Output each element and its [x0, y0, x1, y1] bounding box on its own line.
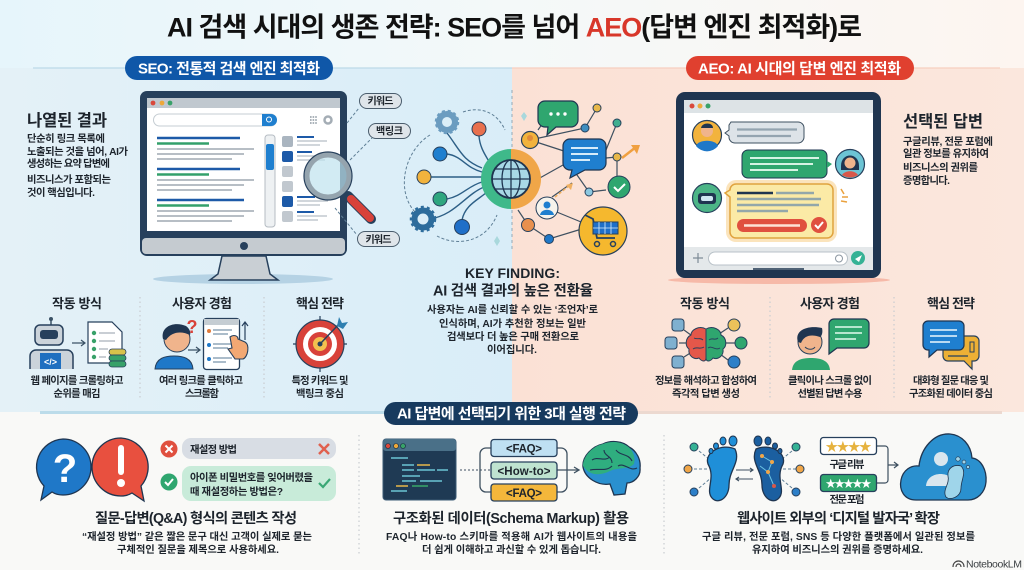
chip: backlink: 백링크: [376, 126, 403, 138]
chip: keyword 1: [360, 94, 402, 108]
panel: strategy 3 digital footprint: 유지하여 비즈니스의 권위를 증명하세요.: [752, 543, 923, 556]
strategy banner: [384, 402, 638, 425]
chip: keyword 1: 키워드: [368, 94, 394, 108]
badge: expert forum: ★★★★★: [826, 478, 872, 490]
SEO column: user experience: 사용자 경험: [172, 296, 232, 311]
panel: strategy 2 Schema: FAQ나 How-to 스키마를 적용해 AI가 웹사이트의 내용을: [386, 530, 638, 543]
key finding: [427, 265, 599, 356]
badge: expert forum: [820, 474, 876, 506]
AEO column: how it works: 정보를 해석하고 합성하여: [655, 374, 757, 387]
title: AI 검색 시대의 생존 전략: SEO를 넘어 AEO(답변 엔진 최적화)로: [167, 12, 862, 42]
icon: tablet with chat answer: [668, 92, 890, 284]
key finding: 검색보다 더 높은 구매 전환으로: [447, 330, 580, 343]
good example row: [160, 466, 336, 501]
icon: code window: [383, 439, 456, 500]
panel: strategy 3 digital footprint: 웹사이트 외부의 ‘디지털 발자국’ 확장: [737, 510, 940, 527]
right network: [518, 101, 640, 255]
icon: cloud with person and footprint: [901, 434, 986, 500]
SEO column: how it works: 순위를 매김: [54, 387, 100, 400]
SEO column: user experience: 스크롤함: [185, 387, 220, 400]
icon: happy user with chat bubble: [792, 319, 869, 370]
chat: highlighted AI answer: [692, 180, 848, 242]
SEO column: key strategy: 핵심 전략: [296, 296, 344, 311]
icon: footprints with nodes: [684, 436, 804, 501]
key finding: 인식하며, AI가 추천한 정보는 일반: [439, 317, 587, 330]
left network: [404, 110, 505, 241]
SEO intro text: 노출되는 것을 넘어, AI가: [27, 145, 129, 158]
badge: expert forum: 전문 포럼: [830, 494, 864, 506]
AEO heading pill: AEO: AI 시대의 답변 엔진 최적화: [698, 60, 901, 78]
AEO intro text: 비즈니스의 권위를: [903, 161, 979, 174]
SEO intro text: 단순히 링크 목록에: [27, 132, 105, 145]
AEO column: user experience: 선별된 답변 수용: [798, 387, 863, 400]
icon: monitor with search results: [140, 91, 347, 284]
SEO intro text: 나열된 결과: [27, 111, 107, 130]
chip: keyword 2: [358, 232, 400, 246]
SEO intro text: 것이 핵심입니다.: [27, 186, 95, 199]
AEO intro text: 구글리뷰, 전문 포럼에: [903, 135, 993, 148]
panel: strategy 1 Q&A: [37, 438, 336, 556]
review badges: [820, 438, 898, 506]
SEO intro text: 생성하는 요약 답변에: [27, 157, 110, 170]
icon: overlapping chat bubbles: [923, 321, 979, 369]
SEO intro text: 비즈니스가 포함되는: [27, 173, 112, 186]
SEO column: how it works: [30, 296, 126, 400]
panel: strategy 1 Q&A: “재설정 방법” 같은 짧은 문구 대신 고객이 실제로 묻는: [82, 530, 313, 543]
icon: globe: [481, 149, 541, 209]
icon: question and exclamation bubbles: ?: [53, 447, 77, 491]
AEO column: key strategy: 대화형 질문 대응 및: [913, 374, 989, 387]
strategy banner: AI 답변에 선택되기 위한 3대 실행 전략: [397, 406, 626, 422]
SEO column: user experience: 여러 링크를 클릭하고: [159, 374, 244, 387]
AEO intro text: 일관 정보를 유지하여: [903, 147, 989, 160]
SEO column: key strategy: 특정 키워드 및: [292, 374, 348, 387]
SEO heading pill: [125, 56, 333, 80]
dotted column dividers: [140, 297, 894, 555]
panel: SEO: [27, 56, 410, 400]
AEO intro text: [903, 112, 993, 187]
SEO column: user experience: [155, 296, 248, 400]
tag: FAQ lower: <FAQ>: [506, 488, 542, 500]
centre graphic: network around globe: [404, 90, 640, 255]
key finding: 사용자는 AI를 신뢰할 수 있는 ‘조언자’로: [427, 303, 599, 316]
badge: Google reviews: 구글 리뷰: [830, 458, 865, 471]
keyword chips: [335, 94, 410, 246]
good example row: 아이폰 비밀번호를 잊어버렸을: [190, 471, 314, 484]
SEO column: how it works: 웹 페이지를 크롤링하고: [30, 374, 124, 387]
chip: keyword 2: 키워드: [366, 233, 392, 246]
AEO column: user experience: [788, 296, 872, 400]
icon: confused user with list: ?: [186, 317, 198, 337]
icon: robot with document: </>: [44, 357, 57, 367]
badge: Google reviews: [820, 438, 876, 471]
AEO column: key strategy: [909, 296, 993, 400]
AEO column: key strategy: 핵심 전략: [927, 296, 975, 311]
panel: strategy 2 Schema: 더 쉽게 이해하고 과신할 수 있게 돕습니다.: [422, 543, 601, 556]
AEO column: how it works: 즉각적 답변 생성: [672, 387, 740, 400]
icon: question and exclamation bubbles: [37, 438, 148, 501]
key finding: KEY FINDING:: [465, 265, 560, 281]
icon: brain: [583, 442, 640, 495]
icon: magnifying glass: [304, 152, 371, 219]
SEO heading pill: SEO: 전통적 검색 엔진 최적화: [138, 60, 320, 78]
chip: backlink: [368, 124, 410, 138]
icon: shopping cart: [579, 207, 627, 255]
panel: strategy 2 Schema: 구조화된 데이터(Schema Markup) 활용: [393, 510, 629, 527]
AEO heading pill: [686, 56, 914, 80]
SEO column: key strategy: 백링크 중심: [296, 387, 344, 400]
AEO column: user experience: 클릭이나 스크롤 없이: [788, 374, 872, 387]
SEO column: how it works: 작동 방식: [52, 296, 102, 311]
AEO column: how it works: 작동 방식: [680, 296, 730, 311]
key finding: 이어집니다.: [487, 343, 537, 356]
AEO column: key strategy: 구조화된 데이터 중심: [909, 387, 993, 400]
chat: green message: [742, 150, 864, 178]
tag: FAQ: <FAQ>: [506, 444, 542, 456]
SEO column: key strategy: [292, 296, 348, 400]
panel: strategy 3 digital footprint: 구글 리뷰, 전문 포럼, SNS 등 다양한 플랫폼에서 일관된 정보를: [702, 530, 976, 543]
panel: AEO: [655, 56, 993, 400]
panel: strategy 2 Schema: [383, 439, 640, 556]
SEO intro text: [27, 111, 129, 199]
key finding: AI 검색 결과의 높은 전환율: [433, 282, 593, 300]
panel: strategy 1 Q&A: 구체적인 질문을 제목으로 사용하세요.: [117, 543, 279, 556]
tag: How-to: <How-to>: [498, 466, 551, 478]
good example row: 때 재설정하는 방법은?: [190, 485, 283, 498]
badge: Google reviews: ★★★★: [826, 440, 872, 454]
AEO intro text: 증명합니다.: [903, 174, 950, 187]
icon: brain with data nodes: [665, 319, 747, 368]
AEO intro text: 선택된 답변: [903, 112, 983, 131]
panel: strategy 3 digital footprint: [684, 434, 986, 556]
AEO column: how it works: [655, 296, 757, 400]
panel: strategy 1 Q&A: 질문-답변(Q&A) 형식의 콘텐츠 작성: [95, 510, 297, 527]
chat: user message: [692, 120, 804, 151]
AEO column: user experience: 사용자 경험: [800, 296, 860, 311]
bad example row: 재설정 방법: [190, 443, 237, 456]
icon: target with arrow: [293, 316, 348, 372]
schema tag boxes: [460, 440, 579, 501]
chat input bar: [684, 247, 873, 270]
bad example row: [160, 438, 336, 459]
